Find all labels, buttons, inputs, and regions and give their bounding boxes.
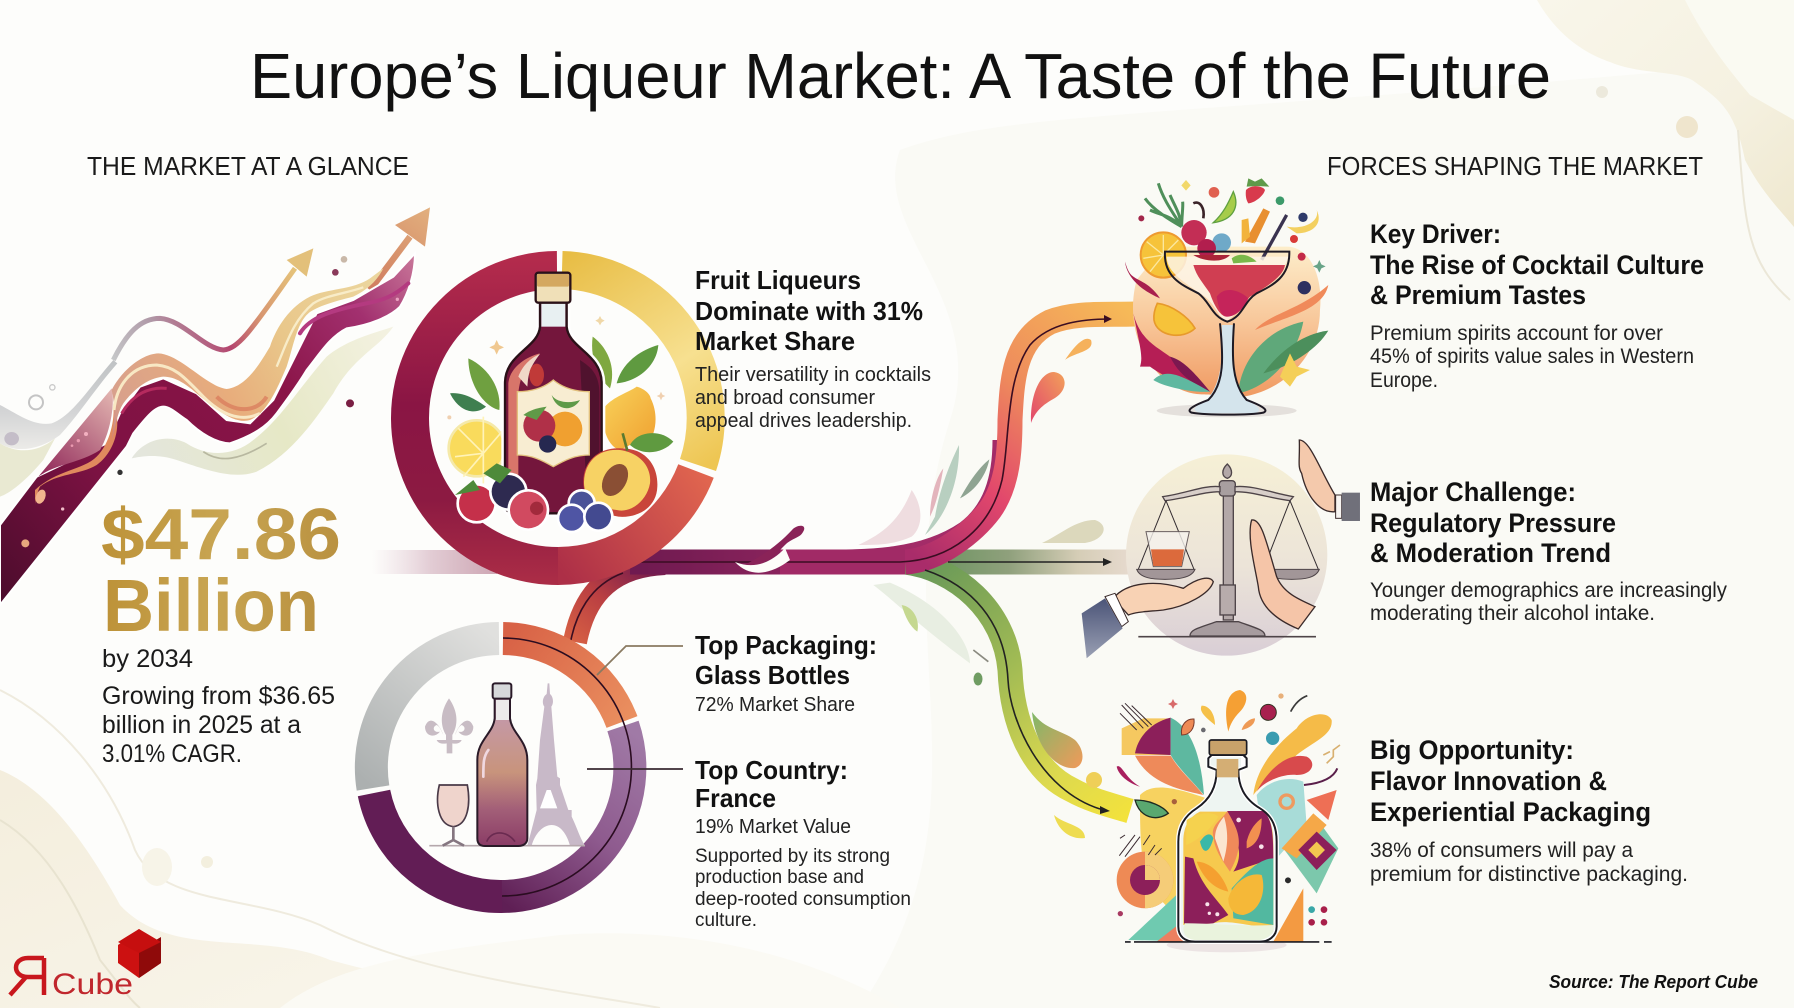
text: top country <box>695 755 911 931</box>
value: 19% Market Value <box>695 816 851 838</box>
straw <box>1262 215 1287 260</box>
pole <box>1223 493 1233 620</box>
cork <box>1209 740 1247 755</box>
glass neck <box>541 303 565 327</box>
heading: Top Packaging: <box>695 630 877 660</box>
stat description <box>102 682 335 768</box>
upper magenta to orange arrow path <box>905 314 1135 562</box>
value: 72% Market Share <box>695 694 855 716</box>
strawberry <box>1246 186 1265 203</box>
text: fruit liqueurs <box>695 265 931 432</box>
body: production base and <box>695 867 864 888</box>
finial <box>1223 464 1232 478</box>
lower green to yellow arrow path <box>905 562 1130 811</box>
body: Premium spirits account for over <box>1370 322 1663 345</box>
peach <box>583 448 657 517</box>
text: big opportunity <box>1370 735 1688 886</box>
pans <box>1137 569 1195 579</box>
cream gold band <box>112 268 383 440</box>
heading: Major Challenge: <box>1370 477 1576 507</box>
body <box>695 364 931 432</box>
body: moderating their alcohol intake. <box>1370 602 1655 625</box>
ground line <box>1125 939 1332 944</box>
heading: Dominate with 31% <box>695 296 923 326</box>
rising market wave illustration <box>0 207 430 605</box>
lemon slice <box>1141 232 1186 278</box>
fleur-de-lis <box>425 698 473 753</box>
orange streak <box>35 403 117 505</box>
wine bottle <box>477 698 527 846</box>
thin rising arrow <box>113 268 295 360</box>
shadow <box>1157 404 1297 417</box>
body: 38% of consumers will pay a <box>1370 839 1633 862</box>
title: Europe’s Liqueur Market: A Taste of the Future <box>250 40 1551 112</box>
donut: packaging and country <box>371 638 631 897</box>
abstract panels <box>1122 718 1170 755</box>
raspberries <box>459 475 611 531</box>
bottle highlights <box>508 353 540 500</box>
heading: & Premium Tastes <box>1370 280 1586 310</box>
icon: fruit liqueur bottle with fruit <box>447 273 673 531</box>
body <box>1370 839 1688 886</box>
heading <box>695 265 923 356</box>
bowl liquid <box>1167 257 1288 321</box>
stat unit: Billion <box>103 564 319 647</box>
body: deep-rooted consumption <box>695 889 911 910</box>
berries in glass <box>1181 220 1207 245</box>
decorative leaves <box>858 445 989 663</box>
purple segment: france <box>501 726 630 896</box>
stat description: 3.01% CAGR. <box>102 740 242 768</box>
body <box>1370 579 1727 625</box>
upper stop hand <box>1299 440 1335 512</box>
orange segment: packaging <box>503 638 622 722</box>
body: Younger demographics are increasingly <box>1370 579 1727 602</box>
body <box>1370 322 1694 392</box>
base <box>1190 622 1265 636</box>
lemon slice <box>449 420 505 476</box>
droplets and dots <box>21 256 399 547</box>
faded lead-in band <box>372 550 497 574</box>
splash background <box>1133 247 1320 397</box>
gray segment <box>371 638 499 788</box>
label fruit <box>552 395 580 408</box>
crimson leaves <box>1133 313 1210 392</box>
heading: Regulatory Pressure <box>1370 508 1616 538</box>
glass <box>1146 532 1189 567</box>
cube icon <box>118 929 161 978</box>
main maroon band <box>0 253 415 605</box>
logo wordmark: Cube <box>52 968 133 1001</box>
reversed R mark <box>10 958 44 995</box>
heading: Glass Bottles <box>695 660 850 690</box>
lower open hand <box>1113 578 1213 615</box>
body: Their versatility in cocktails <box>695 364 931 386</box>
splash drops by arrows <box>1031 372 1065 423</box>
lemon wedge <box>1154 303 1195 335</box>
gray swoosh left <box>0 360 117 449</box>
cherries and garnish dots <box>1209 187 1219 198</box>
thin guide lines <box>640 319 1110 562</box>
stat value: $47.86 <box>101 495 341 575</box>
leaves <box>468 358 500 410</box>
heading: The Rise of Cocktail Culture <box>1370 250 1704 280</box>
icon: cocktail glass with fruit <box>1125 178 1328 417</box>
logo: RCube <box>10 929 161 1001</box>
crimson segment <box>410 270 559 566</box>
bottle glass <box>1178 755 1277 942</box>
pink left band <box>38 388 113 477</box>
middle green arrow path <box>905 550 1135 574</box>
stat year: by 2034 <box>102 645 193 673</box>
heading: France <box>695 783 776 813</box>
ground line <box>1138 634 1316 639</box>
lime wedge <box>1213 192 1236 223</box>
right fade wash <box>1042 520 1104 543</box>
headline stat: $47.86 Billion <box>101 495 341 768</box>
heading <box>695 630 877 690</box>
bottle liquid <box>1183 812 1273 927</box>
icon: france bottle, glass, fleur-de-lis and eiffel tower <box>425 683 585 846</box>
cinnamon <box>1245 208 1270 243</box>
heading <box>1370 477 1616 568</box>
body: premium for distinctive packaging. <box>1370 863 1688 886</box>
dark plum segment <box>374 793 502 897</box>
stat description: Growing from $36.65 <box>102 682 335 710</box>
heading: Market Share <box>695 326 855 356</box>
plinth shadow <box>1167 938 1287 952</box>
center stop hand <box>1250 520 1315 629</box>
heading: Fruit Liqueurs <box>695 265 861 295</box>
circle backdrop <box>1126 454 1327 656</box>
yellow segment <box>562 270 706 465</box>
pale under wave <box>132 327 393 475</box>
heading <box>695 755 848 813</box>
callout: top packaging leader line <box>597 646 683 675</box>
body <box>695 846 911 931</box>
left pan strings <box>1138 501 1318 569</box>
body: and broad consumer <box>695 387 875 409</box>
hatches <box>1119 703 1162 857</box>
leaf <box>1135 800 1168 818</box>
icon: colourful bottle with abstract shapes <box>1117 690 1340 952</box>
heading <box>1370 735 1651 827</box>
lemon whole <box>603 387 656 450</box>
label <box>517 380 589 467</box>
bottle <box>505 302 602 513</box>
pale yellow swoosh left <box>0 438 55 497</box>
stem and foot <box>1195 325 1259 413</box>
heading <box>1370 219 1704 310</box>
text: major challenge <box>1370 477 1727 625</box>
heading: Key Driver: <box>1370 219 1501 249</box>
text: top packaging <box>695 630 877 716</box>
pie circle <box>1117 852 1173 908</box>
source note: Source: The Report Cube <box>1549 972 1758 992</box>
heading: forces shaping the market: FORCES SHAPING THE MARKET <box>1327 151 1703 181</box>
body: appeal drives leadership. <box>695 410 912 432</box>
heading: Flavor Innovation & <box>1370 766 1607 796</box>
cork <box>536 273 570 303</box>
flow connectors <box>570 314 1135 838</box>
donut: fruit liqueurs share <box>410 270 706 566</box>
body: 45% of spirits value sales in Western <box>1370 345 1694 368</box>
big arrow shaft <box>370 237 410 290</box>
heading: & Moderation Trend <box>1370 538 1611 568</box>
rosemary <box>1145 183 1183 227</box>
heading: Top Country: <box>695 755 848 785</box>
lower branch to packaging ring <box>575 563 665 642</box>
stat description: billion in 2025 at a <box>102 711 301 739</box>
trunk recolor overlap <box>780 550 905 574</box>
eiffel tower <box>527 683 585 846</box>
trunk flourish <box>738 526 804 569</box>
icon: scales with glass and stopping hands <box>1082 440 1360 658</box>
heading: Experiential Packaging <box>1370 797 1651 827</box>
body: culture. <box>695 910 757 931</box>
big arrow head <box>395 207 430 247</box>
callout: top country leader line <box>587 768 683 770</box>
drops and dots <box>1226 690 1246 732</box>
beam <box>1163 486 1293 501</box>
floor line <box>429 843 585 848</box>
bottle outline <box>1178 755 1277 942</box>
glass outline <box>1165 252 1289 415</box>
heading: the market at a glance: THE MARKET AT A GLANCE <box>87 151 409 181</box>
sparkles <box>489 340 504 355</box>
sleeve <box>1082 598 1123 658</box>
text: key driver <box>1370 219 1704 392</box>
body: Europe. <box>1370 369 1438 392</box>
wine glass <box>438 785 469 827</box>
green leaves <box>1238 322 1303 393</box>
heading: Big Opportunity: <box>1370 735 1574 765</box>
body: Supported by its strong <box>695 846 890 867</box>
main trunk <box>630 440 1005 562</box>
coral segment <box>558 471 696 566</box>
